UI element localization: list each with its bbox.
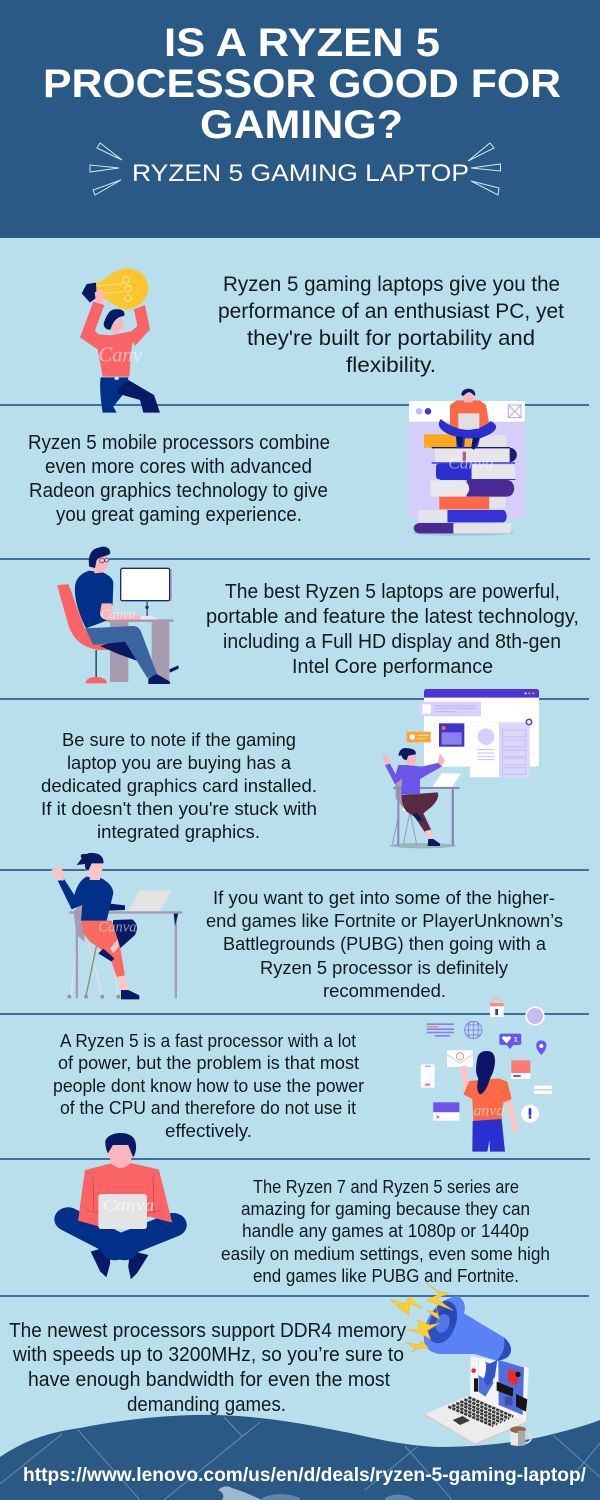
text block: DDR4 memory: The newest processors support DDR4 memory xyxy=(9,1320,406,1342)
text block: best laptops: Intel Core performance xyxy=(292,656,493,678)
icon: man at desktop computer: Canva xyxy=(101,606,136,621)
icon: woman surrounded by app icons xyxy=(421,998,552,1152)
text block: higher-end games: recommended. xyxy=(323,980,446,1001)
text block: DDR4 memory: with speeds up to 3200MHz, so you’re sure to xyxy=(12,1344,404,1366)
panel: DDR4 memory xyxy=(9,1283,531,1446)
text block: portability xyxy=(218,273,564,377)
text block: CPU power: of power, but the problem is that most xyxy=(58,1053,359,1073)
text block: DDR4 memory: have enough bandwidth for even the most xyxy=(28,1369,390,1391)
text block: Ryzen 7 and Ryzen 5: The Ryzen 7 and Ryzen 5 series are xyxy=(253,1177,519,1197)
text block: dedicated graphics xyxy=(41,729,317,842)
text block: Ryzen 7 and Ryzen 5: end games like PUBG and Fortnite. xyxy=(253,1266,519,1286)
panel: dedicated graphics xyxy=(41,689,539,848)
text block: higher-end games: Battlegrounds (PUBG) then going with a xyxy=(223,933,547,954)
panel: CPU power xyxy=(53,998,552,1152)
text block: CPU power: A Ryzen 5 is a fast processor with a lot xyxy=(60,1031,356,1051)
text block: best laptops xyxy=(206,581,579,678)
icon: person lifting light bulb xyxy=(80,268,160,413)
text block: DDR4 memory: demanding games. xyxy=(127,1394,286,1416)
text block: higher-end games: end games like Fortnite or PlayerUnknown’s xyxy=(206,910,563,931)
text block: Ryzen 7 and Ryzen 5: handle any games at 1080p or 1440p xyxy=(242,1221,529,1241)
icon: left burst rays xyxy=(90,143,122,195)
panel: header banner xyxy=(0,0,600,238)
text block: CPU power xyxy=(53,1031,364,1141)
panel: best laptops xyxy=(57,547,579,684)
text block: dedicated graphics: If it doesn't then you're stuck with xyxy=(41,798,317,819)
text block: dedicated graphics: Be sure to note if the gaming xyxy=(62,729,296,750)
icon: person cross-legged with laptop xyxy=(68,1133,173,1279)
title: GAMING? xyxy=(200,103,403,147)
icon: right burst rays xyxy=(468,143,500,195)
text block: DDR4 memory xyxy=(9,1320,406,1416)
icon: woman surrounded by app icons: anva xyxy=(473,1103,504,1120)
text block: dedicated graphics: integrated graphics. xyxy=(97,821,260,842)
icon: person on stack of books xyxy=(409,389,525,536)
title: PROCESSOR GOOD FOR xyxy=(43,62,561,106)
text block: Ryzen 7 and Ryzen 5: easily on medium settings, even some high xyxy=(221,1244,550,1264)
panel: portability xyxy=(80,268,564,413)
text block: higher-end games: Ryzen 5 processor is definitely xyxy=(260,957,509,978)
icon: man at desktop computer xyxy=(57,547,179,684)
text block: mobile processors xyxy=(28,432,330,526)
text block: CPU power: of the CPU and therefore do not use it xyxy=(60,1098,356,1118)
icon: person on stack of books: Canva xyxy=(448,453,494,472)
text block: best laptops: portable and feature the latest technology, xyxy=(206,606,579,628)
icon: woman at desk with web windows xyxy=(382,689,539,848)
title xyxy=(43,21,561,147)
text block: dedicated graphics: laptop you are buying has a xyxy=(67,752,292,773)
text block: portability: performance of an enthusiast PC, yet xyxy=(218,300,564,323)
wave footer xyxy=(0,1415,600,1500)
title: IS A RYZEN 5 xyxy=(164,21,440,65)
icon: megaphone and laptop xyxy=(390,1283,531,1446)
panel: mobile processors xyxy=(28,389,525,536)
text block: Ryzen 7 and Ryzen 5: amazing for gaming because they can xyxy=(241,1199,530,1219)
text block: portability: flexibility. xyxy=(346,354,436,377)
icon: woman at laptop desk: Canva xyxy=(98,920,137,936)
text block: portability: Ryzen 5 gaming laptops give you the xyxy=(223,273,560,296)
text block: higher-end games: If you want to get into some of the higher- xyxy=(213,887,555,908)
text block: higher-end games xyxy=(206,887,563,1001)
text block: CPU power: effectively. xyxy=(165,1121,252,1141)
icon: woman surrounded by app icons: 1 xyxy=(514,1037,518,1044)
icon: person lifting light bulb: Canv xyxy=(98,345,143,367)
text block: best laptops: including a Full HD display and 8th-gen xyxy=(223,631,561,653)
panel: Ryzen 7 and Ryzen 5 xyxy=(68,1133,550,1286)
text block: Ryzen 7 and Ryzen 5 xyxy=(221,1177,550,1286)
icon: laptop keyboard keys xyxy=(448,1397,513,1426)
text block: mobile processors: Ryzen 5 mobile processors combine xyxy=(28,432,330,454)
text block: mobile processors: you great gaming experience. xyxy=(56,504,302,526)
text block: dedicated graphics: dedicated graphics card installed. xyxy=(41,775,317,796)
icon: woman at laptop desk xyxy=(51,853,182,999)
text block: CPU power: people dont know how to use the power xyxy=(53,1076,364,1096)
icon: person cross-legged with laptop: Canva xyxy=(103,1196,155,1215)
text block: mobile processors: Radeon graphics technology to give xyxy=(29,480,328,502)
text block: best laptops: The best Ryzen 5 laptops are powerful, xyxy=(225,581,560,603)
text block: portability: they're built for portability and xyxy=(247,327,535,350)
source url: https://www.lenovo.com/us/en/d/deals/ryzen-5-gaming-laptop/ xyxy=(23,1465,587,1486)
subtitle: RYZEN 5 GAMING LAPTOP xyxy=(132,160,469,187)
text block: mobile processors: even more cores with advanced xyxy=(45,456,312,478)
panel: higher-end games xyxy=(51,853,563,1001)
